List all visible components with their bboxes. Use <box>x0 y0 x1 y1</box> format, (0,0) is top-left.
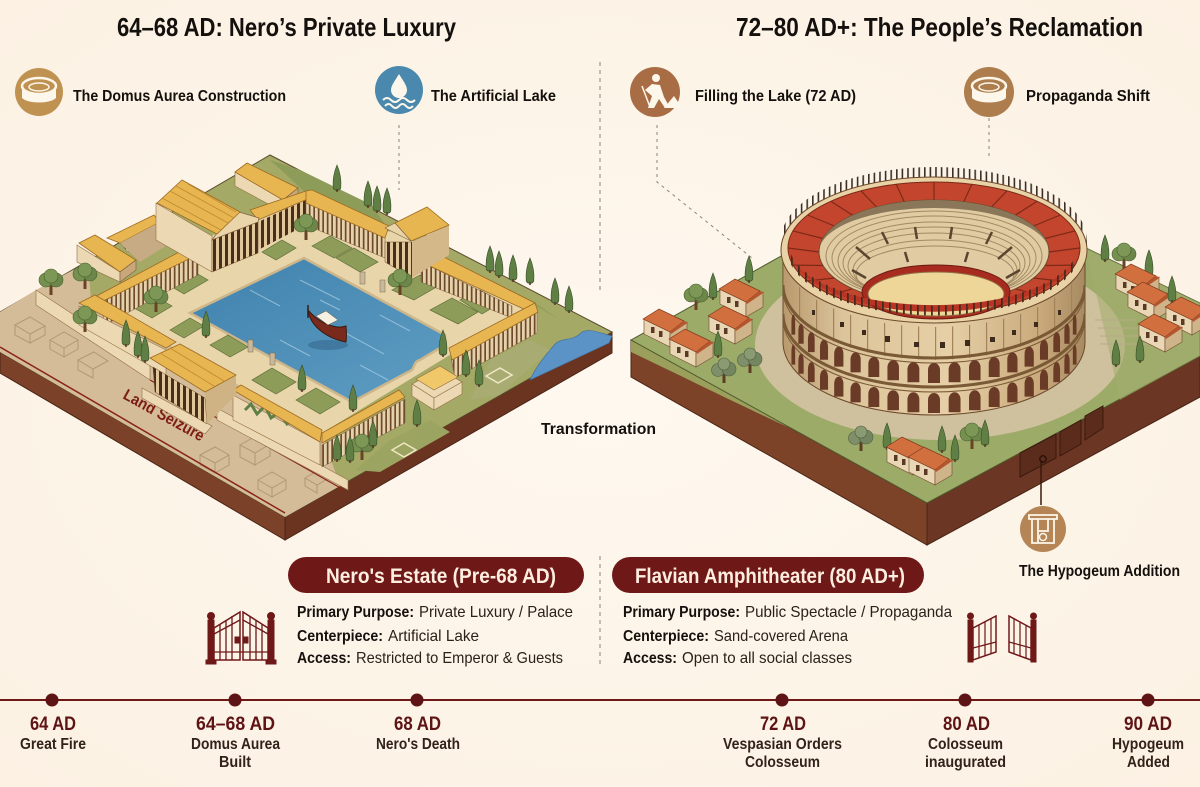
event: 72 AD: Vespasian Orders <box>723 736 842 753</box>
lake <box>190 258 445 402</box>
event: 90 AD: Added <box>1127 754 1170 771</box>
row: access: Access: <box>297 650 351 667</box>
panel: Nero's Estate: Nero's Estate (Pre-68 AD) <box>326 565 556 588</box>
event: 64 AD <box>20 694 86 753</box>
arches row 2 <box>791 315 1077 383</box>
event: 72 AD <box>723 694 842 771</box>
event: 90 AD: 90 AD <box>1124 714 1172 735</box>
event: 80 AD: inaugurated <box>925 754 1006 771</box>
event: 80 AD: Colosseum <box>928 736 1003 753</box>
event: 64 AD: Great Fire <box>20 736 86 753</box>
callout: Hypogeum Addition <box>1019 456 1180 580</box>
trees: estate <box>39 165 573 463</box>
title: left period: 64–68 AD: Nero’s Private Luxury <box>117 12 456 42</box>
row: centerpiece: Artificial Lake <box>388 628 479 645</box>
illustration: Colosseum diorama <box>631 167 1200 545</box>
row: access: Restricted to Emperor & Guests <box>356 650 563 667</box>
event: 64–68 AD <box>191 694 280 771</box>
event: 64–68 AD: Built <box>219 754 251 771</box>
title: right period: 72–80 AD+: The People’s Reclamation <box>736 12 1143 42</box>
event: 90 AD: Hypogeum <box>1112 736 1184 753</box>
event: 80 AD <box>925 694 1006 771</box>
callout: Domus Aurea Construction: The Domus Aurea Construction <box>73 88 286 105</box>
event: 68 AD: 68 AD <box>394 714 441 735</box>
event: 80 AD: 80 AD <box>943 714 990 735</box>
timeline <box>0 694 1200 771</box>
panel: Flavian Amphitheater <box>612 557 952 667</box>
river <box>530 331 612 380</box>
land seizure zone <box>15 317 329 497</box>
callout: Artificial Lake: The Artificial Lake <box>431 88 556 105</box>
event: 64–68 AD: 64–68 AD <box>196 714 275 735</box>
leader line: lake <box>398 125 400 190</box>
panel: Flavian Amphitheater: Flavian Amphitheater (80 AD+) <box>635 565 905 588</box>
windows <box>812 310 1061 348</box>
illustration: Domus Aurea estate diorama <box>0 155 612 540</box>
icon: amphitheater medallion <box>15 68 63 116</box>
colosseum <box>781 167 1087 415</box>
callout: Filling the Lake: Filling the Lake (72 AD) <box>695 88 856 105</box>
event: 64 AD: 64 AD <box>30 714 76 735</box>
event: 90 AD <box>1112 694 1184 771</box>
leader line: propaganda <box>988 118 990 160</box>
callout: Hypogeum Addition: The Hypogeum Addition <box>1019 563 1180 580</box>
hypogeum chambers in slab <box>1020 406 1103 477</box>
row: purpose: Primary Purpose: <box>623 604 740 621</box>
label: Transformation: Transformation <box>541 421 656 438</box>
row: purpose: Public Spectacle / Propaganda <box>745 604 952 621</box>
panel: Nero's Estate <box>288 557 584 667</box>
icon: worker medallion <box>630 67 682 117</box>
row: purpose: Primary Purpose: <box>297 604 414 621</box>
event: 72 AD: Colosseum <box>745 754 820 771</box>
event: 64–68 AD: Domus Aurea <box>191 736 280 753</box>
center divider <box>599 62 601 668</box>
event: 72 AD: 72 AD <box>760 714 806 735</box>
garden beds <box>134 236 502 414</box>
back buildings and wings <box>77 163 538 378</box>
row: access: Access: <box>623 650 677 667</box>
row: purpose <box>297 604 573 621</box>
arches row 1 <box>791 345 1077 413</box>
land seizure label: Land Seizure <box>120 387 207 445</box>
icon: amphitheater medallion <box>964 67 1014 117</box>
statues <box>248 272 385 365</box>
callout: Filling the Lake <box>630 67 856 117</box>
callout: Domus Aurea Construction <box>15 68 286 116</box>
row: centerpiece <box>623 628 848 645</box>
icon: closed gate <box>206 612 276 664</box>
leader line: filling <box>657 125 752 258</box>
row: purpose: Private Luxury / Palace <box>419 604 573 621</box>
boat <box>308 305 348 350</box>
row: centerpiece: Centerpiece: <box>623 628 709 645</box>
icon: open gate <box>968 613 1036 662</box>
courtyard <box>91 193 535 433</box>
green back terrace <box>270 160 390 232</box>
row: purpose <box>623 604 952 621</box>
row: centerpiece: Centerpiece: <box>297 628 383 645</box>
callout: Propaganda Shift: Propaganda Shift <box>1026 88 1151 105</box>
event: 68 AD <box>376 694 460 753</box>
icon: water drop medallion <box>375 66 423 114</box>
front wings and temple <box>79 272 462 467</box>
trees and houses around the arena <box>643 235 1200 485</box>
event: 68 AD: Nero's Death <box>376 736 460 753</box>
callout: Artificial Lake <box>375 66 556 114</box>
callout: Propaganda Shift <box>964 67 1151 117</box>
row: centerpiece <box>297 628 479 645</box>
icon: hypogeum medallion <box>1020 506 1066 552</box>
row: access: Open to all social classes <box>682 650 852 667</box>
row: centerpiece: Sand-covered Arena <box>714 628 848 645</box>
